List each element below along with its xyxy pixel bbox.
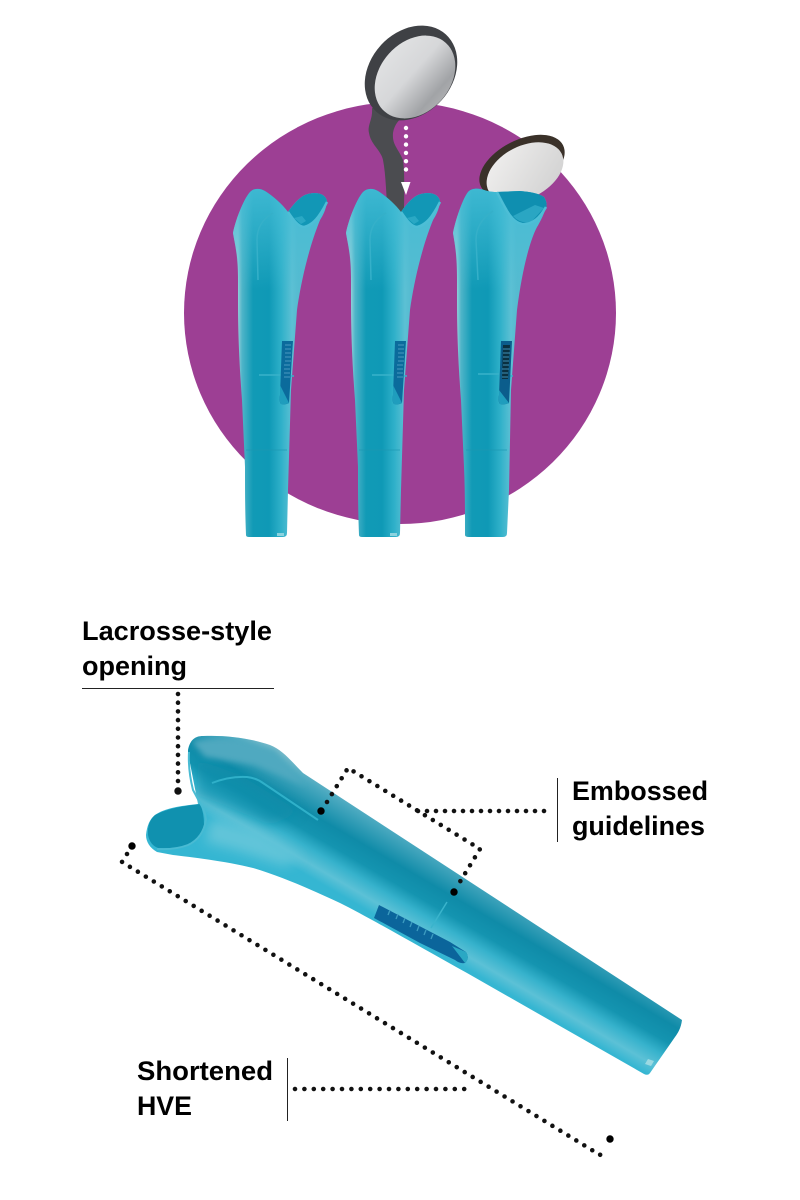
embossed curve: [212, 777, 318, 820]
label text second line: opening: [82, 651, 187, 681]
inner wall: [513, 205, 544, 222]
shading and highlights clipped to tip: [192, 738, 305, 866]
endpoint bottom: [450, 888, 458, 896]
seam: [466, 449, 507, 451]
dotted bracket leader: [122, 854, 605, 1155]
label text: Shortened: [137, 1056, 273, 1086]
right tube opening: [497, 191, 547, 224]
rib highlights: [502, 349, 510, 377]
mirror handle: [369, 108, 405, 215]
middle tube: [346, 189, 440, 537]
dotted shaft: [404, 128, 408, 176]
opening rim: [157, 752, 206, 849]
tilted mirror rim: [469, 122, 575, 210]
label: shortened HVE: [122, 842, 614, 1155]
underline: [82, 688, 274, 689]
end highlight: [645, 1059, 654, 1066]
right tube with mirror inserted: [453, 189, 547, 537]
dotted leader: [176, 694, 180, 784]
divider: [557, 778, 558, 842]
endpoint: [174, 787, 182, 795]
left tube: [233, 189, 327, 537]
tilted mirror behind right tube: [469, 122, 575, 214]
mirror face: [358, 19, 472, 135]
dotted horizontal leader: [295, 1087, 465, 1091]
slot: [499, 341, 512, 404]
dotted horizontal leader: [418, 809, 552, 813]
white dotted arrow into the tube: [401, 128, 410, 195]
embossed guideline: [476, 211, 493, 280]
head shading: [192, 772, 282, 828]
upper lobe tone: [192, 738, 305, 785]
mirror above the middle tube: [346, 7, 476, 215]
horizontal guideline: [478, 374, 513, 376]
label text second line: HVE: [137, 1091, 192, 1121]
right tube body: [453, 189, 547, 537]
embossed tick: [431, 902, 447, 928]
slot end: [452, 946, 468, 963]
arrowhead: [401, 182, 410, 195]
divider: [287, 1058, 288, 1121]
horizontal HVE tip: [146, 736, 682, 1075]
slot lower end: [499, 390, 509, 404]
endpoint left: [128, 842, 136, 850]
head highlight: [205, 818, 300, 866]
purple background circle: [184, 102, 616, 524]
label text second line: guidelines: [572, 811, 705, 841]
tilted mirror face: [477, 130, 573, 214]
label: lacrosse-style opening: [82, 616, 274, 795]
right tube rim: [497, 192, 546, 224]
label: embossed guidelines: [317, 768, 708, 896]
label text: Embossed: [572, 776, 708, 806]
slot ribs: [502, 345, 510, 379]
tip body: [146, 736, 682, 1075]
mirror head rim: [346, 7, 476, 139]
endpoint right: [606, 1135, 614, 1143]
dotted bracket leader: [327, 768, 480, 885]
label text: Lacrosse-style: [82, 616, 272, 646]
slot ticks: [388, 910, 433, 939]
side slot: [374, 905, 468, 963]
right tube top tone: [453, 189, 547, 290]
infographic canvas: [82, 26, 706, 1158]
lower opening: [148, 804, 204, 848]
endpoint top: [317, 807, 325, 815]
